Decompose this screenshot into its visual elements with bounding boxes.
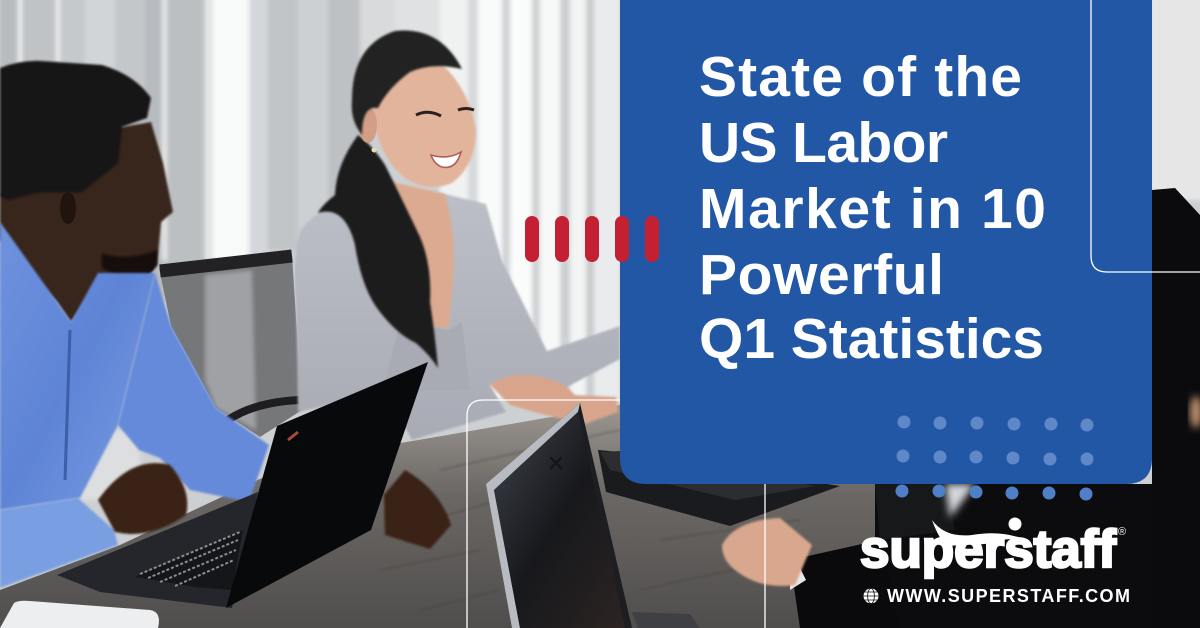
laptop rear xyxy=(598,450,840,526)
man xyxy=(0,61,451,588)
hand xyxy=(490,375,618,424)
dot grid xyxy=(896,416,1094,500)
beard xyxy=(102,250,157,282)
title: US Labor xyxy=(699,111,948,175)
laptop front xyxy=(486,403,700,628)
title: Market in 10 xyxy=(699,177,1046,241)
logo swoosh xyxy=(932,520,1024,546)
website line: WWW.SUPERSTAFF.COM xyxy=(887,586,1130,606)
decorative outline: lower frame xyxy=(467,400,765,628)
red bars accent xyxy=(525,216,659,262)
neck and face xyxy=(0,122,173,322)
woman xyxy=(295,30,620,440)
logo: superstaff: superstaff xyxy=(860,520,1116,579)
shirt sleeve xyxy=(118,273,269,502)
man's hands xyxy=(98,463,187,534)
sweater xyxy=(295,190,620,440)
icon: globe xyxy=(864,588,878,604)
decorative outline: upper right frame xyxy=(1091,0,1200,272)
sweater front V xyxy=(386,320,470,392)
blue title panel xyxy=(620,0,1152,484)
small phone on table xyxy=(0,601,159,628)
title: State of the xyxy=(699,45,1022,109)
title: Powerful xyxy=(699,243,944,307)
chair xyxy=(159,255,302,437)
laptop left xyxy=(57,362,428,608)
table xyxy=(0,405,900,628)
logo: superstaff: ® xyxy=(1118,526,1126,538)
dark figure on the right xyxy=(722,188,1200,628)
face xyxy=(372,62,476,187)
smile and eyes xyxy=(431,152,461,167)
hair xyxy=(352,30,462,135)
shirt torso xyxy=(0,222,155,510)
hair tail xyxy=(318,135,438,368)
hair xyxy=(0,61,151,200)
shirt cuff xyxy=(0,498,118,588)
neck and chest xyxy=(384,180,454,328)
title: Q1 Statistics xyxy=(699,307,1044,371)
x mark xyxy=(551,458,561,468)
title xyxy=(699,45,1046,371)
